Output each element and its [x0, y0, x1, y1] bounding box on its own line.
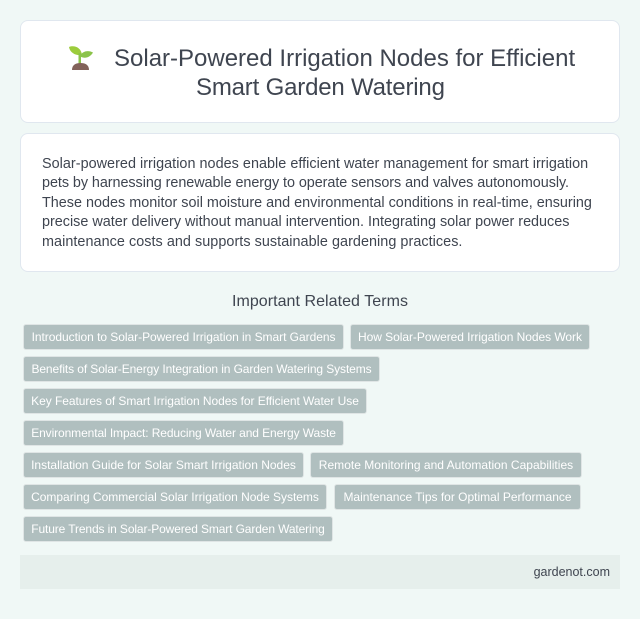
tag	[23, 420, 344, 446]
panel: description card	[20, 133, 620, 272]
tag	[334, 484, 581, 510]
text block: description: maintenance costs and supports sustainable gardening practices.	[42, 234, 462, 250]
title	[114, 45, 575, 101]
tag	[23, 324, 344, 350]
tag	[23, 452, 304, 478]
text block: description	[42, 156, 592, 250]
panel: title card	[20, 20, 620, 123]
tag	[350, 324, 590, 350]
text block: description: precise water delivery without manual intervention. Integrating solar power reduces	[42, 214, 569, 230]
tag: Introduction to Solar-Powered Irrigation in Smart Gardens	[32, 330, 335, 344]
tag: Comparing Commercial Solar Irrigation Node Systems	[31, 490, 319, 504]
footer bar	[20, 555, 620, 589]
heading: related terms: Important Related Terms	[232, 293, 408, 310]
tag group: related terms	[23, 324, 590, 542]
text block: description: Solar-powered irrigation nodes enable efficient water management for smart irrigation	[42, 156, 588, 172]
tag: Environmental Impact: Reducing Water and Energy Waste	[31, 426, 336, 440]
title: Smart Garden Watering	[196, 74, 445, 101]
text block: description: pets by harnessing renewable energy to operate sensors and valves autonomously.	[42, 175, 569, 191]
tag: Remote Monitoring and Automation Capabilities	[319, 458, 573, 472]
tag: Future Trends in Solar-Powered Smart Garden Watering	[31, 522, 325, 536]
text block: description: These nodes monitor soil moisture and environmental conditions in real-time, ensuring	[42, 195, 592, 211]
tag: Maintenance Tips for Optimal Performance	[343, 490, 572, 504]
tag: How Solar-Powered Irrigation Nodes Work	[358, 330, 582, 344]
tag	[23, 388, 367, 414]
tag	[23, 484, 327, 510]
tag: Key Features of Smart Irrigation Nodes for Efficient Water Use	[31, 394, 359, 408]
tag: Installation Guide for Solar Smart Irrigation Nodes	[31, 458, 296, 472]
tag: Benefits of Solar-Energy Integration in Garden Watering Systems	[31, 362, 372, 376]
icon: seedling	[69, 46, 93, 70]
tag	[23, 516, 333, 542]
title: Solar-Powered Irrigation Nodes for Efficient	[114, 45, 575, 72]
footer text: gardenot.com	[534, 565, 610, 579]
tag	[23, 356, 380, 382]
tag	[310, 452, 582, 478]
